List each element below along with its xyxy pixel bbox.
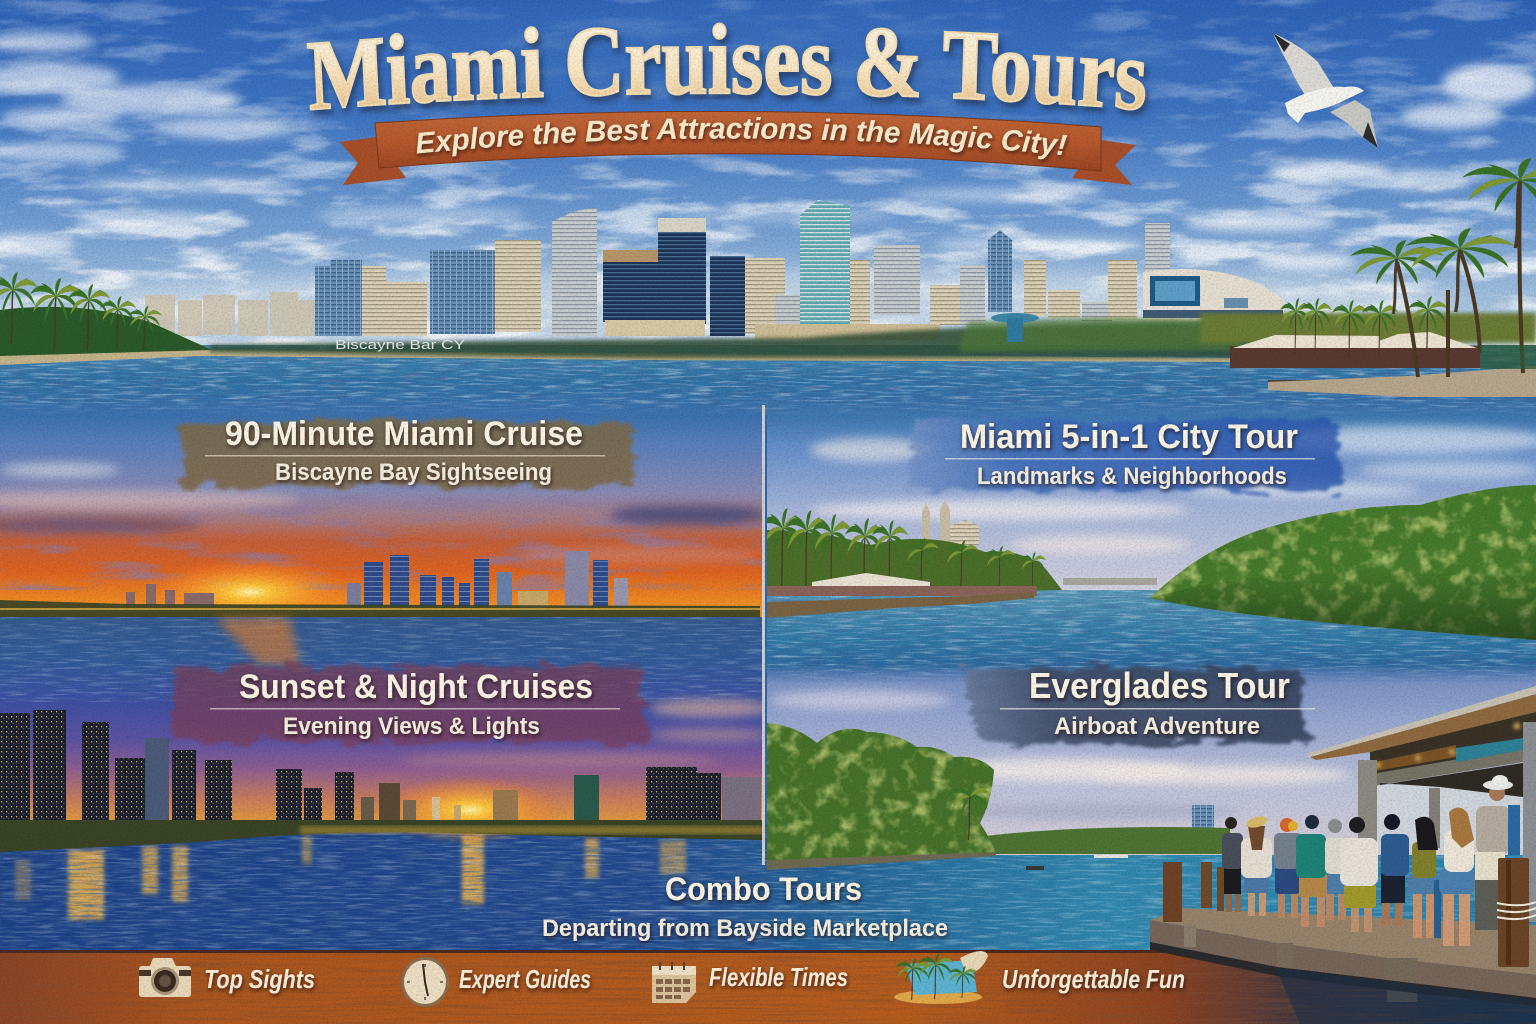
mangrove shoreline xyxy=(1150,485,1536,640)
person 6 xyxy=(1340,817,1378,932)
icon: camera xyxy=(139,958,191,997)
seagull xyxy=(1273,33,1378,148)
heading: Everglades tour: Airboat Adventure xyxy=(1054,713,1260,740)
shoreline xyxy=(0,307,1300,365)
person 10 with hat xyxy=(1475,775,1520,880)
towers and palm shore xyxy=(760,500,1157,618)
near wing xyxy=(1273,33,1335,98)
bay water xyxy=(0,345,1536,415)
heading: 90-minute cruise: Biscayne Bay Sightseeing xyxy=(275,459,552,486)
left shore palm trees xyxy=(0,272,162,352)
island with trees xyxy=(767,715,997,870)
feature: top sights: Top Sights xyxy=(204,964,315,994)
icon: calendar xyxy=(652,962,696,1003)
heading: Everglades tour xyxy=(960,665,1315,744)
person 7 xyxy=(1381,814,1409,926)
far shore and building xyxy=(985,805,1230,854)
sunset sky xyxy=(0,400,770,626)
upper water xyxy=(767,590,1536,680)
person 8 xyxy=(1408,817,1441,938)
person 1 xyxy=(1222,817,1243,912)
panel: left sunset and night cruises xyxy=(0,400,770,852)
person 5 xyxy=(1325,819,1349,920)
feature: unforgettable fun: Unforgettable Fun xyxy=(1002,964,1185,994)
small Biscayne Bay label: Biscayne Bar CY xyxy=(335,337,465,352)
feature: flexible times xyxy=(652,962,848,1003)
heading: combo tours: Departing from Bayside Marketplace xyxy=(542,915,948,942)
sky with clouds xyxy=(0,0,1536,360)
person 3 xyxy=(1274,818,1302,918)
ribbon banner xyxy=(340,110,1136,185)
hut roof and structure xyxy=(1306,686,1536,922)
heading: 5-in-1 city tour: Miami 5-in-1 City Tour xyxy=(960,418,1298,456)
heading: 5-in-1 city tour: Landmarks & Neighborhoods xyxy=(977,463,1287,490)
title: Miami Cruises & Tours xyxy=(306,22,1152,118)
counter xyxy=(1475,880,1515,930)
right shore with palms and cafe xyxy=(1200,158,1536,397)
icon: clock xyxy=(401,957,449,1007)
panel: right landmarks and Everglades xyxy=(760,400,1536,870)
icon: palm island xyxy=(894,951,988,1004)
heading: sunset and night cruises xyxy=(170,666,650,742)
banner tagline: Explore the Best Attractions in the Magic City! xyxy=(415,116,1070,164)
lower water xyxy=(0,825,1536,954)
arena building xyxy=(1143,269,1284,322)
day sky xyxy=(767,400,1536,600)
bottom wood strip xyxy=(0,950,1536,1024)
dark water below dock xyxy=(1276,968,1536,1024)
feature: top sights xyxy=(139,958,315,997)
ribbon tails xyxy=(340,137,1136,185)
night skyline xyxy=(0,710,763,852)
feature: unforgettable fun xyxy=(894,951,1185,1004)
main Miami skyline xyxy=(145,200,1170,340)
deck xyxy=(1150,908,1536,1006)
person 9 xyxy=(1439,807,1475,946)
heading: 5-in-1 city tour xyxy=(905,418,1345,490)
sunset skyline xyxy=(0,551,760,618)
central divider line xyxy=(762,405,765,865)
feature: expert guides: Expert Guides xyxy=(459,964,591,994)
person 4 xyxy=(1296,815,1327,927)
heading: 90-minute cruise: 90-Minute Miami Cruise xyxy=(225,415,583,453)
feature: flexible times: Flexible Times xyxy=(709,962,848,992)
dock with ticket hut and visitors xyxy=(1150,686,1536,1006)
front post with rope xyxy=(1497,858,1536,967)
person 2 xyxy=(1241,814,1272,916)
mid water and dusk sky xyxy=(0,617,770,844)
heading: sunset and night cruises: Sunset & Night Cruises xyxy=(239,668,593,706)
heading: combo tours xyxy=(542,871,948,942)
back mooring posts xyxy=(1163,862,1224,922)
lower sky xyxy=(767,664,1536,855)
body xyxy=(1285,86,1364,123)
heading: sunset and night cruises: Evening Views & Lights xyxy=(283,713,540,740)
far wing xyxy=(1330,100,1378,148)
heading: 90-minute cruise xyxy=(180,415,634,486)
feature: expert guides xyxy=(401,957,591,1007)
heading: combo tours: Combo Tours xyxy=(665,871,862,907)
heading: Everglades tour: Everglades Tour xyxy=(1029,665,1290,706)
